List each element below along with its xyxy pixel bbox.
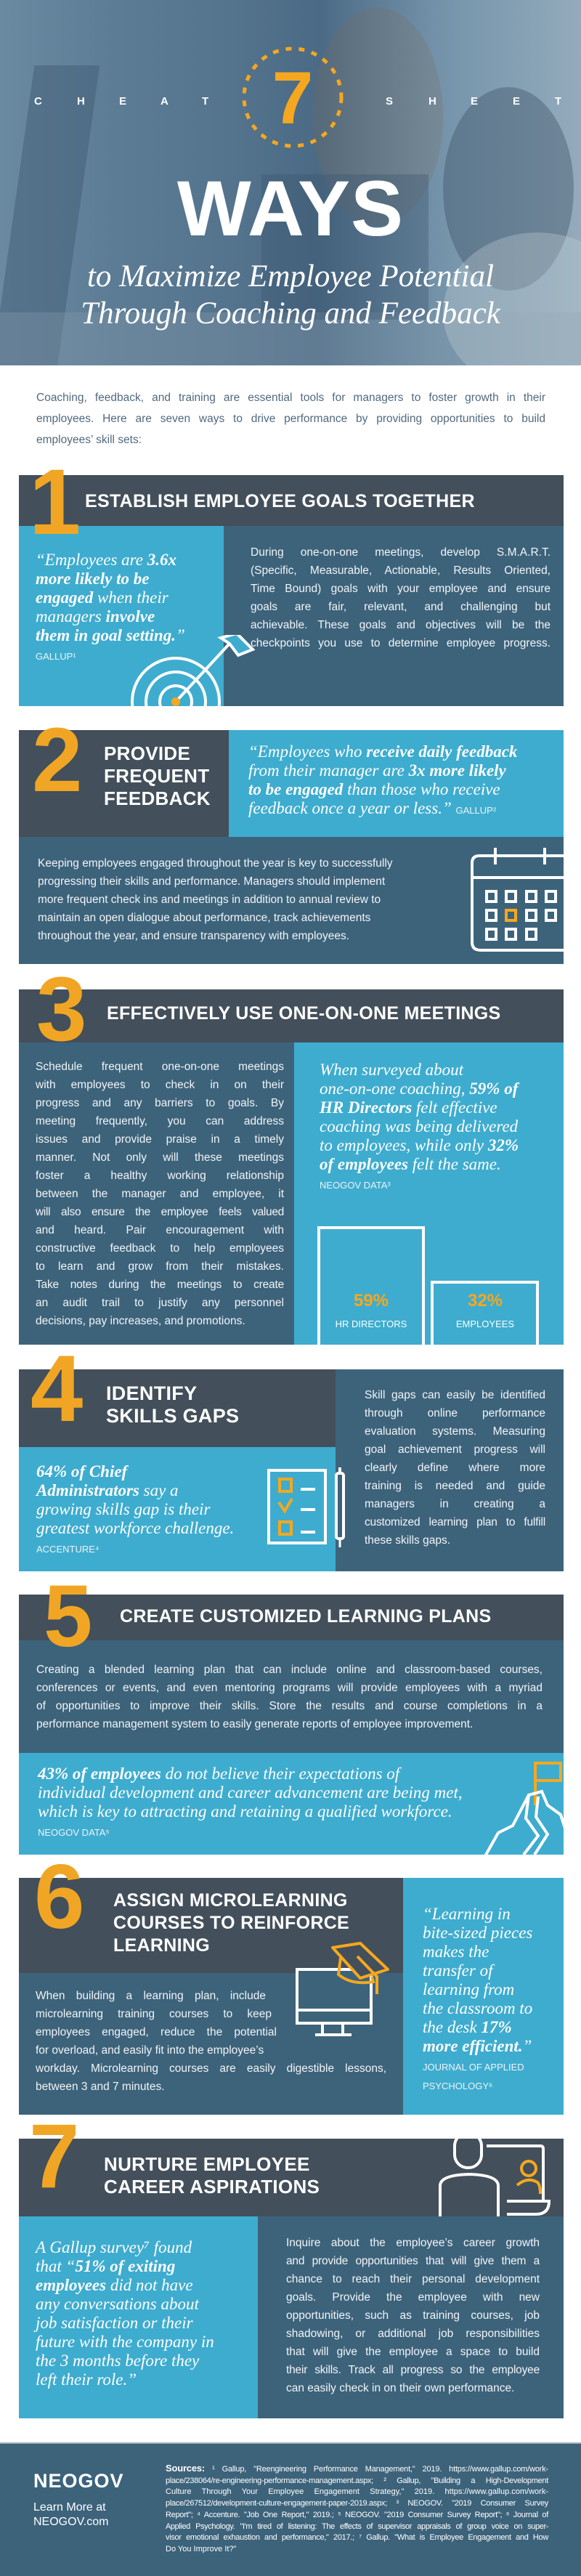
bar chart: 59%: [354, 1291, 389, 1311]
sources: Report"; ⁴ Accenture. "Job One Report," 2019.; ⁵ NEOGOV. "2019 Consumer Survey Report"; ⁶ Journal of: [166, 2511, 548, 2519]
quote: growing skills gap is their: [36, 1500, 210, 1518]
quote: that “51% of exiting: [36, 2257, 175, 2275]
quote: managers involve: [36, 607, 155, 625]
number 3: 3: [36, 959, 87, 1060]
heading: FEEDBACK: [104, 787, 211, 809]
body text: When building a learning plan, include: [36, 1990, 266, 2002]
body text: maintain an open dialogue about performance, track achievements: [38, 912, 370, 924]
quote: from their manager are 3x more likely: [248, 761, 506, 779]
icon: dashed circle with 7: [243, 46, 343, 148]
subtitle: [81, 259, 501, 331]
body text: Keeping employees engaged throughout the year is key to successfully: [38, 857, 393, 870]
panel 1: establish goals: [19, 475, 564, 706]
body text: more frequent check ins and meetings in addition to annual review to: [38, 894, 381, 906]
body text: [251, 546, 550, 649]
heading: NURTURE EMPLOYEE: [104, 2153, 310, 2175]
body text: of opportunities to improve their skills. Store the results and course completions in a: [36, 1700, 543, 1712]
quote: makes the: [423, 1943, 489, 1961]
body text: employees engaged, reduce the potential: [36, 2026, 277, 2038]
quote: the desk 17%: [423, 2018, 512, 2036]
quote: individual development and career advancement are being met,: [38, 1783, 463, 1802]
body text: with employees to check in on their: [36, 1079, 284, 1091]
quote: any conversations about: [36, 2295, 199, 2313]
body text: foster a healthy working relationship: [36, 1170, 284, 1182]
quote: ACCENTURE⁴: [36, 1544, 99, 1555]
panel 2: frequent feedback: [19, 730, 564, 964]
sources: visor emotional exhaustion and performance," 2017.; ⁷ Gallup. "What is Employee Engagement and How: [166, 2533, 548, 2542]
number 1: 1: [29, 450, 81, 554]
body text: clearly define where more: [365, 1462, 545, 1474]
body text: to learn and grow from their mistakes.: [36, 1260, 284, 1273]
body text: goal achievement progress will: [365, 1443, 545, 1456]
cheat sheet label: H: [428, 95, 436, 108]
quote: the classroom to: [423, 1999, 532, 2017]
body text: training is needed and guide: [365, 1480, 545, 1492]
body text: conferences or events, and even mentoring programs will provide employees with a myriad: [36, 1682, 543, 1694]
title: WAYS: WAYS: [177, 164, 404, 252]
body text: these skills gaps.: [365, 1534, 450, 1547]
quote: “Employees are 3.6x: [36, 551, 176, 569]
sources: [166, 2463, 549, 2553]
quote: left their role.”: [36, 2370, 137, 2389]
body text: Time Bound) goals with your employee and ensure: [251, 583, 550, 595]
body text: can easily check in on their own performance.: [286, 2382, 514, 2394]
panel 6: microlearning: [19, 1878, 564, 2115]
body text: manner. Not only will these meetings: [36, 1151, 284, 1164]
quote: PSYCHOLOGY⁶: [423, 2081, 492, 2091]
body text: issues and provide praise in a timely: [36, 1133, 284, 1146]
body text: [38, 857, 393, 942]
sources: Sources: ¹ Gallup, "Reengineering Performance Management," 2019. https://www.gallup.com/work-: [166, 2463, 548, 2474]
quote: bite-sized pieces: [423, 1924, 532, 1942]
quote: greatest workforce challenge.: [36, 1519, 234, 1537]
quote: future with the company in: [36, 2333, 214, 2351]
quote: 64% of Chief: [36, 1462, 127, 1481]
body text: will also ensure the employee feels valued: [36, 1206, 284, 1218]
sources: Do You Improve It?": [166, 2545, 236, 2553]
body text: [36, 1061, 284, 1327]
quote: transfer of: [423, 1961, 492, 1980]
body text: and heard. Pair encouragement with: [36, 1224, 284, 1236]
icon: flag on mountain: [484, 1762, 564, 1855]
body text: During one-on-one meetings, develop S.M.A.R.T.: [251, 546, 550, 559]
cheat sheet label: A: [161, 95, 168, 108]
sources: place/267512/development-culture-engagement-paper-2019.aspx; ³ NEOGOV. "2019 Consumer Survey: [166, 2499, 548, 2508]
quote: of employees felt the same.: [320, 1155, 501, 1173]
quote: feedback once a year or less.” GALLUP²: [248, 799, 496, 817]
heading: EFFECTIVELY USE ONE-ON-ONE MEETINGS: [107, 1003, 501, 1024]
quote: one-on-one coaching, 59% of: [320, 1080, 518, 1098]
body text: Skill gaps can easily be identified: [365, 1389, 545, 1401]
body text: between the manager and employee, it: [36, 1188, 284, 1200]
body text: Schedule frequent one-on-one meetings: [36, 1061, 284, 1073]
quote: more likely to be: [36, 570, 150, 588]
heading: [113, 1890, 349, 1956]
body text: opportunities, such as training courses, job: [286, 2309, 540, 2322]
intro text: Coaching, feedback, and training are essential tools for managers to foster growth in their: [36, 392, 545, 404]
subtitle: Through Coaching and Feedback: [81, 296, 500, 331]
body text: progress and any barriers to goals. By: [36, 1097, 284, 1109]
quote: A Gallup survey⁷ found: [36, 2238, 192, 2256]
body text: workday. Microlearning courses are easily digestible lessons,: [36, 2062, 386, 2075]
quote: [35, 1462, 234, 1555]
hero banner: [0, 0, 581, 365]
heading: IDENTIFY: [106, 1382, 197, 1404]
cheat sheet label: [34, 95, 561, 108]
body text: customized learning plan to fulfill: [365, 1516, 545, 1528]
sources: Culture Through Your Employee Engagement Strategy," 2019. https://www.gallup.com/work-: [166, 2487, 548, 2496]
quote: learning from: [423, 1980, 514, 1998]
sources: Applied Psychology. "I'm tired of listening: The effects of supervisor appraisals of group voice on super-: [166, 2522, 548, 2531]
quote: When surveyed about: [320, 1061, 463, 1079]
body text: (Specific, Measurable, Actionable, Results Oriented,: [251, 564, 550, 577]
heading: [104, 2153, 320, 2198]
body text: between 3 and 7 minutes.: [36, 2081, 165, 2093]
body text: microlearning training courses to keep: [36, 2008, 272, 2020]
body text: their skills. Track all progress so the employee: [286, 2364, 540, 2376]
heading: CAREER ASPIRATIONS: [104, 2176, 320, 2198]
body text: Creating a blended learning plan that can include online and classroom-based courses,: [36, 1664, 543, 1676]
body text: throughout the year, and ensure transparency with employees.: [38, 930, 349, 942]
body text: progressing their skills and performance. Managers should implement: [38, 875, 385, 888]
body text: achievable. These goals and objectives will be the: [251, 619, 550, 631]
panel 5: learning plans: [19, 1595, 564, 1855]
intro text: [36, 392, 545, 446]
icon: person at laptop: [439, 2139, 550, 2216]
body text: Take notes during the meetings to create: [36, 1279, 284, 1291]
quote: Administrators say a: [36, 1481, 179, 1499]
quote: the 3 months before they: [36, 2352, 199, 2370]
number 4: 4: [31, 1335, 83, 1441]
quote: [38, 1765, 463, 1838]
cheat sheet label: H: [77, 95, 85, 108]
quote: coaching was being delivered: [320, 1117, 518, 1135]
heading: ASSIGN MICROLEARNING: [113, 1890, 348, 1911]
intro text: employees. Here are seven ways to drive performance by providing opportunities to build: [36, 413, 545, 425]
cheat sheet label: S: [386, 95, 393, 108]
subtitle: to Maximize Employee Potential: [87, 259, 494, 293]
panel 4: skills gaps: [19, 1369, 564, 1571]
number 7: 7: [29, 2106, 80, 2207]
bar chart: EMPLOYEES: [456, 1319, 514, 1329]
body text: [286, 2237, 540, 2394]
bar chart: HR DIRECTORS: [336, 1319, 407, 1329]
icon: checklist and pen: [267, 1467, 345, 1547]
cheat sheet label: C: [34, 95, 42, 108]
body text: for overload, and easily fit into the employee’s: [36, 2044, 264, 2057]
learn more: [33, 2501, 108, 2528]
heading: PROVIDE: [104, 742, 190, 764]
quote: GALLUP¹: [36, 651, 76, 662]
body text: [36, 1664, 543, 1730]
body text: meeting frequently, you can address: [36, 1115, 284, 1127]
body text: [365, 1389, 545, 1547]
footer: [0, 2442, 581, 2576]
cheat sheet label: T: [202, 95, 208, 108]
body text: and provide opportunities that will give them a: [286, 2255, 540, 2267]
bar chart: 32%: [468, 1291, 503, 1311]
heading: LEARNING: [113, 1935, 210, 1956]
quote: more efficient.”: [423, 2037, 532, 2055]
body text: goals are fair, relevant, and challenging but: [251, 601, 550, 613]
quote: [36, 551, 185, 662]
quote: job satisfaction or their: [36, 2314, 193, 2332]
body text: checkpoints you use to determine employee progress.: [251, 637, 550, 649]
bar chart: [317, 1226, 539, 1345]
heading: ESTABLISH EMPLOYEE GOALS TOGETHER: [85, 491, 475, 511]
panel 7: career aspirations: [19, 2139, 564, 2418]
learn more: Learn More at: [33, 2501, 106, 2514]
heading: COURSES TO REINFORCE: [113, 1913, 349, 1933]
icon: target with arrow: [131, 635, 256, 706]
cheat sheet label: E: [513, 95, 520, 108]
quote: employees did not have: [36, 2276, 193, 2294]
icon: computer with graduation cap: [296, 1942, 389, 2036]
body text: chance to reach their personal development: [286, 2273, 540, 2285]
heading: [106, 1382, 239, 1427]
quote: [320, 1061, 520, 1191]
quote: NEOGOV DATA⁵: [38, 1827, 110, 1838]
learn more: NEOGOV.com: [33, 2516, 108, 2528]
body text: [36, 1990, 386, 2093]
background photo approximation: [0, 7, 581, 365]
panel 3: one-on-one meetings: [19, 989, 564, 1345]
quote: to be engaged than those who receive: [248, 780, 500, 798]
icon: dashed circle with 7: 7: [272, 57, 313, 139]
quote: [33, 2238, 214, 2389]
quote: “Employees who receive daily feedback: [248, 742, 517, 761]
body text: managers in creating a: [365, 1498, 545, 1510]
quote: engaged when their: [36, 588, 168, 607]
quote: NEOGOV DATA³: [320, 1180, 391, 1191]
quote: “Learning in: [423, 1905, 511, 1923]
body text: constructive feedback to help employees: [36, 1242, 284, 1255]
quote: [248, 742, 517, 817]
quote: to employees, while only 32%: [320, 1136, 519, 1154]
body text: shadowing, or additional job responsibilities: [286, 2328, 540, 2340]
body text: decisions, pay increases, and promotions.: [36, 1315, 245, 1327]
cheat sheet label: E: [119, 95, 126, 108]
heading: [104, 742, 211, 809]
quote: [423, 1905, 532, 2091]
cheat sheet label: E: [471, 95, 478, 108]
heading: SKILLS GAPS: [106, 1405, 239, 1427]
quote: which is key to attracting and retaining a qualified workforce.: [38, 1802, 452, 1820]
intro text: employees’ skill sets:: [36, 434, 142, 446]
number 6: 6: [34, 1847, 85, 1948]
quote: JOURNAL OF APPLIED: [423, 2062, 524, 2073]
body text: that will give the employee a space to build: [286, 2346, 540, 2358]
logo: NEOGOV: [33, 2470, 124, 2492]
number 2: 2: [32, 710, 83, 811]
quote: HR Directors felt effective: [320, 1098, 497, 1117]
icon: calendar: [471, 848, 564, 952]
body text: through online performance: [365, 1407, 545, 1419]
sources: place/238064/re-engineering-performance-management.aspx; ² Gallup, "Building a High-Development: [166, 2476, 548, 2485]
body text: goals. Provide the employee with new: [286, 2291, 540, 2304]
body text: an audit trail to justify any personnel: [36, 1297, 284, 1309]
body text: Inquire about the employee’s career growth: [286, 2237, 540, 2249]
heading: FREQUENT: [104, 765, 209, 787]
hero banner: T: [555, 95, 561, 108]
quote: them in goal setting.”: [36, 626, 185, 644]
body text: evaluation systems. Measuring: [365, 1425, 545, 1438]
number 5: 5: [44, 1566, 92, 1665]
quote: 43% of employees do not believe their expectations of: [38, 1765, 399, 1783]
heading: CREATE CUSTOMIZED LEARNING PLANS: [120, 1606, 491, 1627]
body text: performance management system to easily generate reports of employee improvement.: [36, 1718, 473, 1730]
